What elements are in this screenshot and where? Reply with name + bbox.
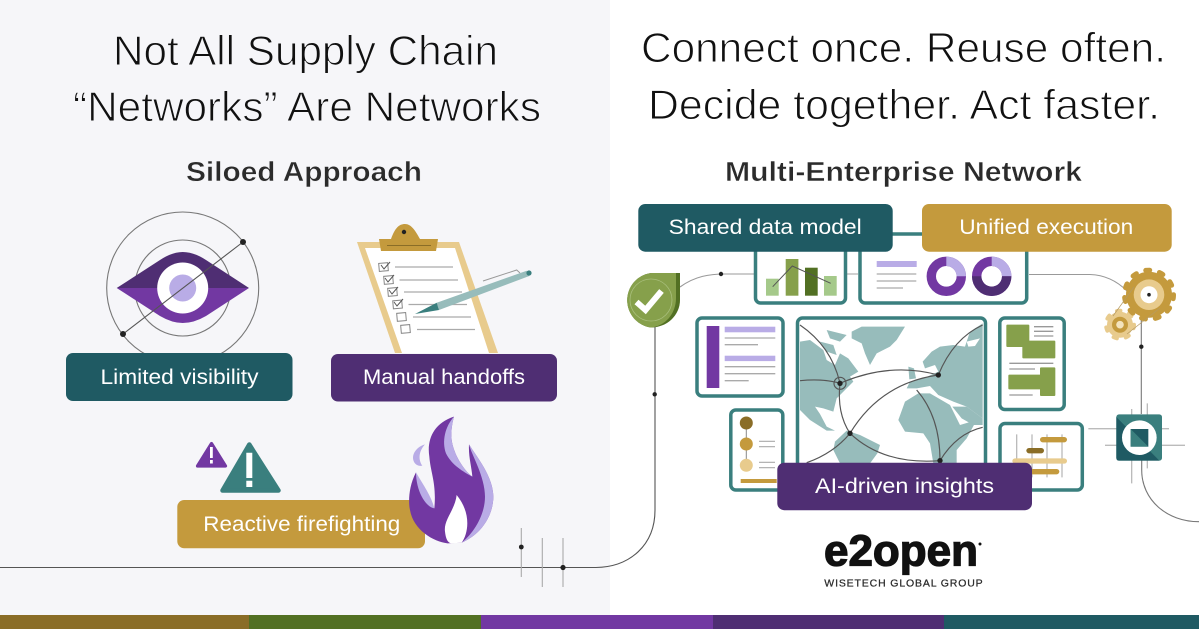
title: left <box>73 27 541 130</box>
logo: e2open: WISETECH GLOBAL GROUP <box>824 578 983 590</box>
icon: flame <box>409 417 493 543</box>
logo: e2open: e2open <box>824 527 978 576</box>
label: manual handoffs <box>331 354 557 402</box>
label: shared data model <box>638 204 893 252</box>
card: donut charts <box>860 234 1027 303</box>
card: bar chart <box>756 234 846 303</box>
connectors: right network <box>680 272 1199 522</box>
label: manual handoffs: Manual handoffs <box>363 366 525 389</box>
icon: green check badge <box>627 273 680 328</box>
heading: siloed approach: Siloed Approach <box>186 156 422 187</box>
card: process flow <box>1000 318 1064 410</box>
label: reactive firefighting: Reactive firefighting <box>203 513 400 536</box>
label: unified execution <box>922 204 1172 252</box>
icon: gears <box>1106 270 1174 339</box>
icon: chip <box>1088 403 1185 483</box>
panel: siloed approach <box>66 27 557 548</box>
card: gantt chart <box>1000 424 1082 490</box>
icon: eye with target rings <box>107 212 259 364</box>
label: reactive firefighting <box>177 500 425 548</box>
title: right: Decide together. Act faster. <box>648 81 1160 128</box>
title: left: “Networks” Are Networks <box>73 83 541 130</box>
label: AI-driven insights <box>777 463 1032 510</box>
card: document list <box>697 318 783 396</box>
label: unified execution: Unified execution <box>959 216 1133 239</box>
label: limited visibility: Limited visibility <box>100 366 259 389</box>
icon: clipboard and pen <box>357 224 532 353</box>
label: AI-driven insights: AI-driven insights <box>815 475 994 498</box>
label: shared data model: Shared data model <box>669 216 862 239</box>
icon: warning triangles <box>198 444 278 490</box>
heading: multi-enterprise network: Multi-Enterprise Network <box>725 156 1082 187</box>
panel: multi-enterprise network <box>627 24 1199 590</box>
title: right <box>641 24 1166 128</box>
map: world routes <box>798 318 986 483</box>
title: right: Connect once. Reuse often. <box>641 24 1166 71</box>
title: left: Not All Supply Chain <box>113 27 498 74</box>
connector line across panels <box>0 326 657 587</box>
card: timeline <box>731 410 783 490</box>
footer colour bar <box>0 615 1199 629</box>
label: limited visibility <box>66 353 292 401</box>
